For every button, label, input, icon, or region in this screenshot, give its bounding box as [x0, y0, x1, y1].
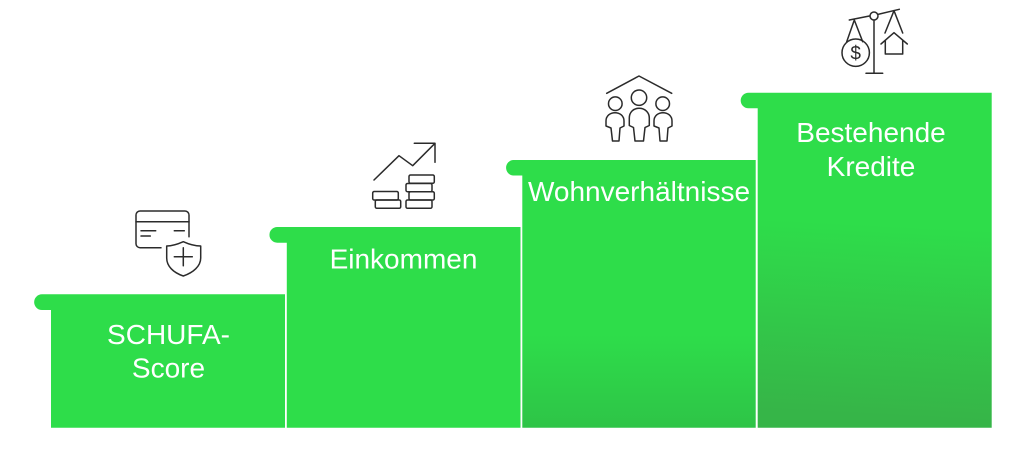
label: Bestehende Kredite: Bestehende: [796, 117, 946, 148]
label: SCHUFA-Score: SCHUFA-: [107, 319, 230, 350]
icon: family under a roof: [606, 76, 672, 141]
label: SCHUFA-Score: Score: [132, 352, 205, 384]
icon: rising arrow with coins: [373, 143, 435, 208]
label: Bestehende Kredite: Kredite: [827, 151, 915, 182]
icon: credit card with shield: [136, 211, 201, 276]
icon glyph: dollar sign: $: [850, 44, 861, 64]
icon: balance scale with money and house: [842, 9, 907, 73]
label: Einkommen: Einkommen: [330, 244, 477, 274]
step 3: Wohnverhältnisse: [506, 160, 756, 428]
step 2: Einkommen: [269, 227, 520, 428]
step 1: SCHUFA-Score: [34, 294, 285, 428]
step 4: Bestehende Kredite: [741, 93, 992, 428]
label: Wohnverhältnisse: Wohnverhältnisse: [528, 176, 750, 207]
